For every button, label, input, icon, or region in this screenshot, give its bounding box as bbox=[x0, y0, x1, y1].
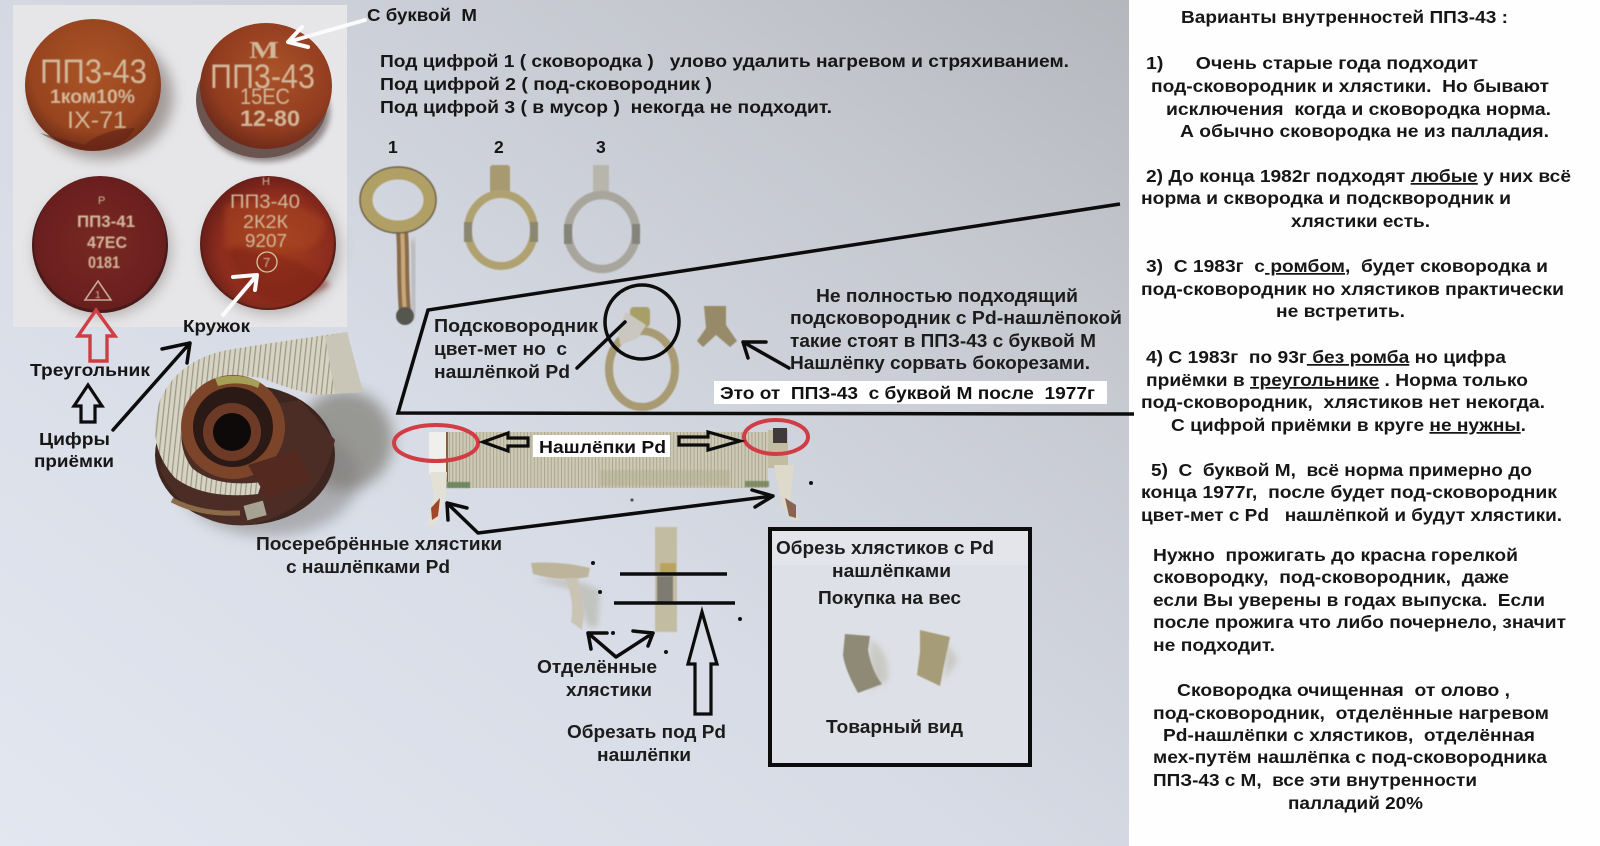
cap 2 bbox=[196, 23, 332, 162]
item 5: конца 1977г, после будет под-сковородник bbox=[1141, 482, 1557, 502]
scrap text top: Обрезь хлястиков с Pd bbox=[776, 538, 994, 558]
number 3: 3 bbox=[596, 137, 606, 157]
item 1: исключения когда и сковородка норма. bbox=[1166, 99, 1551, 119]
part 1: frying-pan ring with stem bbox=[360, 167, 436, 325]
black arrow to кружок bbox=[113, 343, 190, 430]
label: product look: Товарный вид bbox=[826, 717, 964, 737]
burn test note: если Вы уверены в годах выпуска. Если bbox=[1153, 590, 1545, 610]
item 4: 4) С 1983г по 93г без ромба но цифра bbox=[1146, 347, 1506, 367]
right text panel background bbox=[1129, 0, 1600, 846]
cap 1 bbox=[25, 19, 173, 159]
item 3: не встретить. bbox=[1276, 301, 1405, 321]
cap 4 bbox=[200, 176, 340, 314]
big hollow arrow up bbox=[688, 612, 717, 714]
arrow: white to circle mark bbox=[223, 275, 257, 315]
item 4: приёмки в треугольнике . Норма только bbox=[1146, 370, 1528, 390]
label: silvered leads: Посеребрённые хлястики bbox=[256, 534, 502, 554]
hollow red arrow to triangle bbox=[78, 310, 115, 361]
item 5: 5) С буквой М, всё норма примерно до bbox=[1151, 460, 1532, 480]
cap 1: IX-71 bbox=[67, 107, 127, 134]
item 1 bbox=[1146, 53, 1551, 141]
arrow to small piece bbox=[743, 342, 789, 368]
label: подсковородник: нашлёпкой Pd bbox=[434, 362, 570, 382]
cap 3: 47ЕС bbox=[87, 233, 127, 252]
item 3: 3) С 1983г с ромбом , будет сковородка и bbox=[1146, 256, 1548, 276]
label: Pd patches: Нашлёпки Pd bbox=[539, 437, 666, 457]
cap 3: 1 bbox=[95, 290, 101, 301]
cap 4: 2К2К bbox=[243, 212, 289, 232]
label: подсковородник: Подсковородник bbox=[434, 316, 599, 336]
item 1: А обычно сковородка не из палладия. bbox=[1180, 121, 1549, 141]
text block: not fully suitable: подсковородник с Pd-нашлёпокой bbox=[790, 308, 1122, 328]
cap 3: ПП3-41 bbox=[77, 212, 135, 231]
palladium summary: мех-путём нашлёпка с под-сковородника bbox=[1153, 747, 1547, 767]
item 3 bbox=[1141, 256, 1564, 321]
burn test note: Нужно прожигать до красна горелкой bbox=[1153, 545, 1518, 565]
cap 3: Р bbox=[98, 195, 105, 207]
palladium summary: под-сковородник, отделённые нагревом bbox=[1153, 703, 1549, 723]
palladium summary bbox=[1153, 680, 1549, 813]
text block: under digit notes bbox=[380, 51, 1069, 117]
label: cut under Pd: нашлёпки bbox=[597, 745, 691, 765]
cap 2: 12-80 bbox=[240, 106, 300, 131]
arrow: white to letter M bbox=[288, 20, 365, 47]
cut lines bbox=[614, 574, 735, 603]
label: separated leads: Отделённые bbox=[537, 657, 657, 677]
red highlight left bbox=[394, 425, 478, 461]
scrap text top: Покупка на вес bbox=[818, 588, 961, 608]
item 2: норма и сквородка и подсквородник и bbox=[1141, 188, 1511, 208]
text block: right column bbox=[1141, 7, 1571, 813]
scrap text top bbox=[776, 538, 994, 608]
palladium summary: ППЗ-43 с М, все эти внутренности bbox=[1153, 770, 1477, 790]
item 5: цвет-мет с Pd нашлёпкой и будут хлястики. bbox=[1141, 505, 1562, 525]
cap 1: 1ком10% bbox=[50, 87, 135, 108]
scrap pieces bbox=[843, 630, 958, 693]
cap 1: ПП3-43 bbox=[40, 53, 147, 91]
cap 4: 7 bbox=[263, 255, 270, 270]
label: silvered leads bbox=[256, 534, 502, 577]
circle highlight bbox=[605, 285, 679, 359]
label: separated leads: хлястики bbox=[566, 680, 652, 700]
cap 2: 15ЕС bbox=[240, 84, 290, 109]
label: подсковородник: цвет-мет но с bbox=[434, 339, 567, 359]
item 4: С цифрой приёмки в круге не нужны . bbox=[1171, 415, 1526, 435]
separated lead pieces bbox=[531, 527, 677, 632]
label: кружок: Кружок bbox=[183, 316, 250, 336]
text block: not fully suitable: Нашлёпку сорвать бокорезами. bbox=[790, 353, 1090, 373]
label: acceptance digits: Цифры bbox=[39, 429, 110, 449]
double arrow: separated leads bbox=[588, 631, 653, 657]
part 2: under-pan ring bbox=[464, 165, 538, 266]
cap 4: 9207 bbox=[245, 231, 287, 251]
label: silvered leads: с нашлёпками Pd bbox=[286, 557, 450, 577]
part 3: discarded ring bbox=[564, 165, 640, 269]
scrap text top: нашлёпками bbox=[832, 561, 951, 581]
label: triangle: Треугольник bbox=[30, 360, 150, 380]
label: acceptance digits: приёмки bbox=[34, 451, 114, 471]
palladium summary: палладий 20% bbox=[1288, 793, 1423, 813]
dots near pieces bbox=[591, 561, 742, 654]
panel: scrap box bbox=[770, 529, 1030, 765]
item 2: хлястики есть. bbox=[1291, 211, 1430, 231]
palladium summary: Сковородка очищенная от олово , bbox=[1177, 680, 1510, 700]
pointer line to patch bbox=[577, 322, 625, 368]
item 4: под-сковородник, хлястиков нет некогда. bbox=[1141, 392, 1545, 412]
double arrow to leads bbox=[447, 490, 773, 533]
palladium summary: Pd-нашлёпки с хлястиков, отделённая bbox=[1163, 725, 1535, 745]
label: подсковородник bbox=[434, 316, 599, 382]
background photo surface bbox=[0, 0, 1129, 846]
polygon callout outline bbox=[398, 204, 1134, 414]
dots bbox=[630, 481, 813, 502]
item 4 bbox=[1141, 347, 1545, 435]
small Pd piece bbox=[697, 306, 737, 347]
red highlight right bbox=[744, 420, 808, 454]
item 2: 2) До конца 1982г подходят любые у них всё bbox=[1146, 166, 1571, 186]
text block: not fully suitable: Не полностью подходящий bbox=[816, 286, 1078, 306]
label: acceptance digits bbox=[34, 429, 114, 471]
cap 3: 0181 bbox=[88, 253, 120, 272]
panel: capacitor photos bbox=[13, 5, 347, 327]
label: separated leads bbox=[537, 657, 657, 700]
text block: not fully suitable bbox=[790, 286, 1122, 373]
item 2 bbox=[1141, 166, 1571, 231]
number 1: 1 bbox=[388, 137, 398, 157]
text block: under digit notes: Под цифрой 3 ( в мусор ) некогда не подходит. bbox=[380, 97, 832, 117]
burn test note: после прожига что либо почернело, значит bbox=[1153, 612, 1566, 632]
text block: not fully suitable: такие стоят в ППЗ-43 с буквой М bbox=[790, 331, 1096, 351]
burn test note: сковородку, под-сковородник, даже bbox=[1153, 567, 1509, 587]
item 3: под-сковородник но хлястиков практически bbox=[1141, 279, 1564, 299]
label: С буквой М: С буквой М bbox=[367, 5, 477, 25]
white label: after 1977: Это от ППЗ-43 с буквой М после 1977г bbox=[720, 383, 1095, 403]
straightened resistive strip bbox=[427, 428, 800, 526]
cap 2: ПП3-43 bbox=[210, 58, 315, 96]
item 1: под-сковородник и хлястики. Но бывают bbox=[1151, 76, 1549, 96]
item 1: 1) Очень старые года подходит bbox=[1146, 53, 1478, 73]
item 5 bbox=[1141, 460, 1562, 525]
cap 4: Н bbox=[262, 176, 270, 188]
ring with Pd patch bbox=[609, 307, 675, 407]
burn test note bbox=[1153, 545, 1566, 655]
label: cut under Pd: Обрезать под Pd bbox=[567, 722, 726, 742]
cap 3 bbox=[32, 176, 171, 316]
coil with housing bbox=[155, 332, 393, 536]
text block: under digit notes: Под цифрой 1 ( сковородка ) улово удалить нагревом и стряхиванием. bbox=[380, 51, 1069, 71]
cap 4: ПП3-40 bbox=[230, 192, 300, 213]
hollow black arrow up bbox=[74, 385, 102, 422]
burn test note: не подходит. bbox=[1153, 635, 1275, 655]
cap 2: М bbox=[249, 38, 279, 64]
hollow arrow left bbox=[483, 433, 528, 451]
number 2: 2 bbox=[494, 137, 504, 157]
heading: Варианты внутренностей ППЗ-43 : bbox=[1181, 7, 1508, 27]
label: cut under Pd bbox=[567, 722, 726, 765]
text block: under digit notes: Под цифрой 2 ( под-сковородник ) bbox=[380, 74, 712, 94]
hollow arrow right bbox=[679, 432, 740, 450]
